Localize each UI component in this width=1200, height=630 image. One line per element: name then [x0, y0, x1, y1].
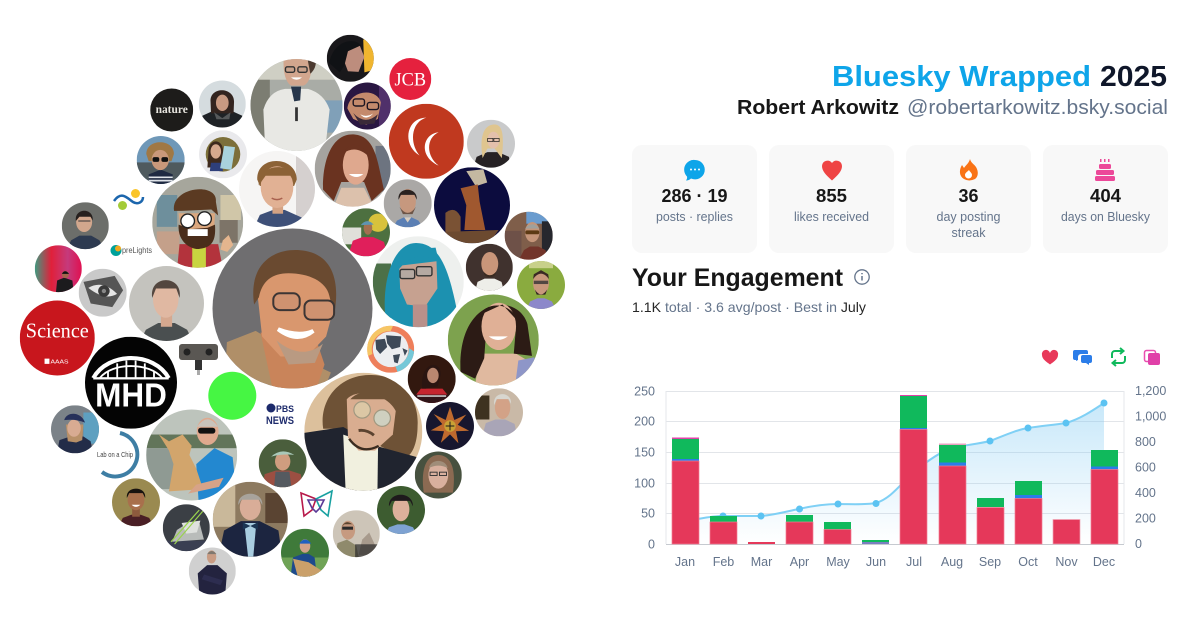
avatar: woman in cap [51, 405, 99, 453]
bar: May [824, 522, 851, 544]
icon: heart [822, 161, 842, 180]
panel: day posting streak [906, 145, 1031, 253]
bar: Nov [1053, 520, 1080, 544]
left axis labels: 0 [648, 538, 655, 552]
left axis labels [634, 384, 655, 552]
bar: Oct [1015, 481, 1042, 544]
avatar: Science journal logo [20, 300, 95, 376]
icon: reposts [1112, 348, 1125, 366]
right axis labels: 0 [1135, 537, 1142, 551]
avatar: man with glasses on foliage [517, 261, 565, 309]
logo: PBS News: NEWS [266, 415, 294, 427]
avatar bubble cluster [20, 35, 565, 595]
right axis labels: 1,200 [1135, 384, 1166, 398]
panel: day posting streak: day posting [936, 210, 1001, 224]
avatar: cat with lasers [163, 504, 210, 551]
month labels [675, 555, 1115, 569]
month labels: Mar [751, 555, 772, 569]
icon: birthday cake [1095, 159, 1115, 181]
panel: likes received: likes received [794, 210, 869, 224]
engagement summary: 1.1K total · 3.6 avg/post · Best in July [632, 299, 866, 315]
panel: posts and replies [632, 145, 757, 253]
month labels: Nov [1055, 555, 1078, 569]
avatar: man in hoodie [62, 202, 109, 249]
logo: preLights [110, 245, 152, 256]
panel: likes received [769, 145, 894, 253]
logo: Lab on a Chip [97, 433, 137, 476]
cumulative line [685, 403, 1104, 521]
avatar: man with orange sunglasses [505, 212, 553, 260]
panel: posts and replies: 286 · 19 [662, 186, 728, 206]
right axis labels: 200 [1135, 512, 1156, 526]
month labels: Aug [941, 555, 963, 569]
avatar: long-haired man in dark jacket [304, 373, 422, 491]
left axis labels: 250 [634, 384, 655, 398]
month labels: Apr [790, 555, 809, 569]
avatar: man with dog [146, 410, 237, 500]
combo chart: monthly engagement bars and cumulative line [634, 384, 1166, 569]
avatar: woman with dark hair on green [448, 294, 539, 386]
chart legend icons [1042, 348, 1160, 366]
avatar: smiling man with stubble [384, 179, 432, 227]
avatar: woman with dark hair and yellow edge [327, 35, 374, 82]
user name and handle [737, 97, 1168, 119]
avatar: MHD bridge logo [85, 337, 177, 429]
left axis labels: 200 [634, 414, 655, 428]
avatar: young man smiling [239, 151, 315, 227]
right axis labels: 1,000 [1135, 410, 1166, 424]
month labels: Feb [713, 555, 734, 569]
avatar: curly man in sunglasses [137, 136, 185, 184]
bar: Feb [710, 516, 737, 544]
icon: likes [1042, 350, 1058, 364]
stacked bars [672, 395, 1118, 544]
avatar: smiling young man [112, 478, 160, 526]
avatar: JCB journal logo [389, 58, 431, 100]
avatar: nature logo [150, 88, 193, 132]
panel: posts and replies: posts · replies [656, 210, 733, 224]
user name and handle: Robert Arkowitz [737, 97, 899, 119]
title: Bluesky Wrapped [832, 61, 1091, 93]
avatar: MHD bridge logo: MHD [95, 378, 167, 415]
icon: replies [1073, 350, 1092, 365]
logo: preLights: preLights [122, 246, 152, 255]
avatar: bearded man with glasses, purple [344, 82, 391, 130]
avatar: orange mandala [426, 402, 474, 450]
icon: speech bubble [684, 160, 705, 180]
bar: Aug [939, 444, 966, 544]
avatar: woman with auburn hair [315, 131, 391, 207]
bar: Jun [862, 540, 889, 544]
avatar: red journal logo with crescents [389, 104, 464, 179]
panel: days on Bluesky [1043, 145, 1168, 253]
icon: info [855, 270, 869, 284]
month labels: Dec [1093, 555, 1115, 569]
avatar: Robert Arkowitz, central large portrait [212, 228, 372, 388]
bar: Dec [1091, 450, 1118, 544]
panel: days on Bluesky: days on Bluesky [1061, 210, 1151, 224]
avatar: eye engraving [79, 269, 127, 317]
bar: Sep [977, 498, 1004, 544]
left axis labels: 150 [634, 446, 655, 460]
icon: flame [960, 159, 978, 180]
month labels: Oct [1018, 555, 1038, 569]
bar: Apr [786, 515, 813, 544]
right axis labels: 600 [1135, 460, 1156, 474]
line data points [720, 400, 1108, 520]
right axis labels: 800 [1135, 435, 1156, 449]
logo: interlaced butterfly [301, 491, 332, 516]
month labels: Sep [979, 555, 1001, 569]
month labels: May [826, 555, 851, 569]
grid lines [666, 391, 1124, 544]
left axis labels: 50 [641, 506, 655, 520]
avatar: woman holding book [199, 130, 247, 178]
avatar: JCB journal logo: JCB [395, 70, 426, 90]
left axis labels: 100 [634, 476, 655, 490]
month labels: Jun [866, 555, 886, 569]
bar: Jan [672, 438, 699, 544]
avatar: man in pink shirt with cap [342, 208, 390, 256]
avatar: world map logo [366, 326, 414, 373]
right axis labels [1135, 384, 1166, 551]
avatar: man in blue shirt [377, 486, 425, 534]
logo: Lab on a Chip: Lab on a Chip [97, 450, 133, 459]
logo: PBS News [266, 404, 294, 427]
avatar: man with cat and glasses [333, 510, 380, 557]
avatar: woman with blue hair [373, 236, 464, 327]
user name and handle: @robertarkowitz.bsky.social [907, 97, 1168, 119]
avatar: woman in lab coat [250, 59, 342, 151]
avatar: woman hiker with hat [259, 439, 307, 487]
avatar: man in suit with arms crossed [189, 548, 236, 594]
avatar: man with blue cap and dog [281, 529, 329, 577]
month labels: Jul [906, 555, 922, 569]
right axis labels: 400 [1135, 486, 1156, 500]
avatar: nature logo: nature [156, 104, 188, 116]
icon: quotes [1144, 350, 1160, 365]
avatar: woman with glasses [415, 452, 462, 498]
panel: days on Bluesky: 404 [1090, 186, 1121, 206]
avatar: cartoon bearded man [152, 177, 243, 268]
title: 2025 [1100, 61, 1167, 93]
month labels: Jan [675, 555, 695, 569]
panel: day posting streak: 36 [958, 186, 978, 206]
logo: PBS News: PBS [276, 404, 294, 414]
avatar: older man in bow tie [213, 482, 288, 557]
icon: vintage device [179, 344, 218, 375]
avatar: Science journal logo: Science [26, 318, 89, 342]
avatar: bald man with beard [466, 244, 513, 291]
avatar: woman in red on TV [408, 355, 456, 403]
logo: wave and dots [114, 189, 143, 210]
avatar: solid green circle [208, 372, 256, 420]
panel: day posting streak: streak [952, 226, 986, 240]
avatar: blonde woman [467, 120, 515, 168]
heading: Your Engagement: Your Engagement [632, 264, 844, 292]
avatar: woman in scarf [199, 80, 246, 128]
panel: likes received: 855 [816, 186, 847, 206]
avatar: older man with white hair [475, 388, 523, 436]
avatar: man in grey hoodie [129, 266, 204, 341]
bar: Mar [748, 542, 775, 544]
cumulative area [685, 403, 1104, 544]
bar: Jul [900, 395, 927, 544]
avatar: man against red gradient [35, 245, 82, 292]
avatar: statue on navy [434, 167, 510, 243]
avatar: Science journal logo: AAAS [51, 360, 69, 366]
